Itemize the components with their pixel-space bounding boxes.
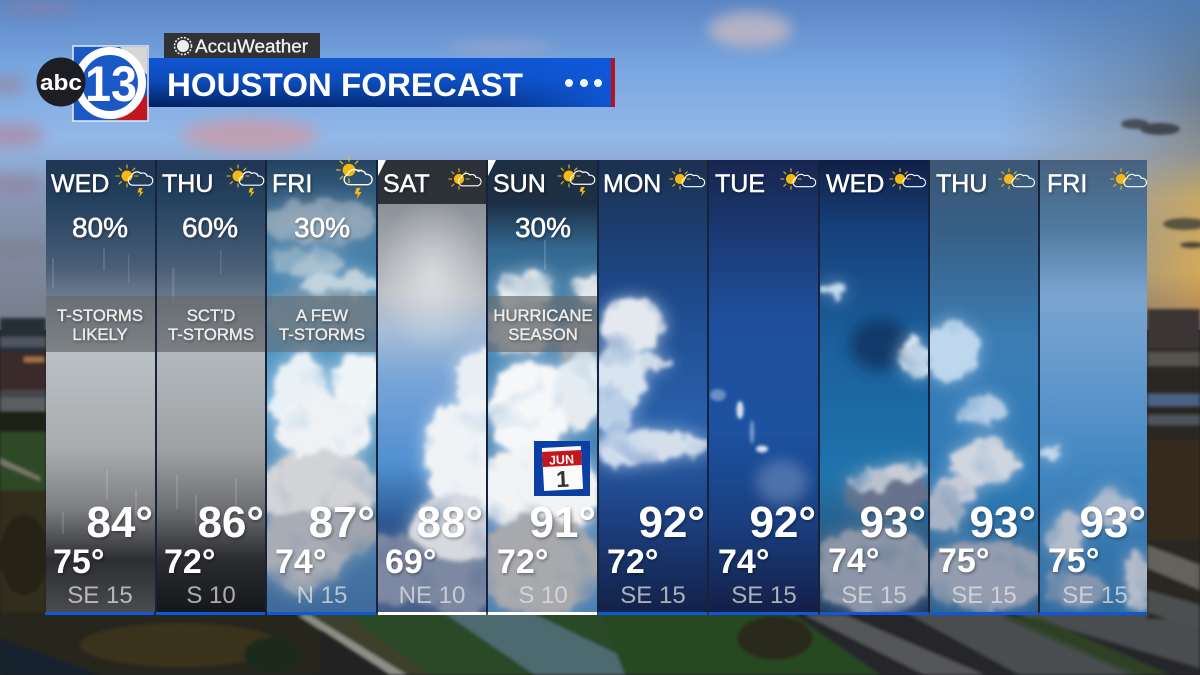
condition band (267, 296, 376, 352)
forecast note (168, 306, 254, 344)
day label: FRI (1047, 170, 1087, 198)
weather icon (999, 169, 1035, 189)
forecast note: T-STORMS (279, 325, 365, 344)
high temperature: 88° (416, 498, 483, 547)
wind: S 10 (186, 582, 236, 609)
forecast note: LIKELY (72, 325, 128, 344)
sky (46, 160, 155, 612)
wind: N 15 (297, 582, 347, 609)
forecast note (493, 306, 593, 344)
wind: SE 15 (620, 582, 686, 609)
sky (378, 204, 486, 612)
sky (820, 160, 928, 612)
clouds (710, 389, 808, 504)
forecast note: SCT'D (187, 306, 235, 325)
day label: WED (51, 170, 109, 198)
low temperature: 69° (385, 543, 436, 581)
wind: S 10 (518, 582, 568, 609)
day label: FRI (272, 170, 312, 198)
weather icon (336, 157, 372, 199)
low temperature: 72° (497, 543, 548, 581)
low temperature: 75° (1048, 542, 1099, 580)
condition band (46, 296, 155, 352)
rain chance: 30% (515, 212, 571, 243)
rain chance: 60% (182, 212, 238, 243)
low temperature: 72° (164, 543, 215, 581)
brand name: AccuWeather (195, 36, 308, 56)
panel: SAT (378, 160, 486, 615)
low temperature: 74° (275, 543, 326, 581)
underline (709, 612, 818, 615)
wind: SE 15 (67, 582, 133, 609)
panel: WED next week (815, 160, 935, 615)
weather icon (670, 169, 705, 189)
weather icon (1111, 169, 1147, 189)
wind: NE 10 (399, 582, 465, 609)
panel: THU next week (930, 160, 1038, 615)
sky (930, 160, 1038, 612)
forecast note (57, 306, 143, 344)
sky (267, 160, 376, 612)
weather icon (449, 169, 481, 189)
forecast note: T-STORMS (57, 306, 143, 325)
forecast note: A FEW (296, 306, 348, 325)
weather icon (116, 165, 153, 197)
forecast note: T-STORMS (168, 325, 254, 344)
clouds (815, 286, 935, 615)
day label: THU (936, 170, 987, 198)
icon: June 1 calendar: JUN (549, 452, 574, 468)
rain streaks (172, 250, 237, 525)
high temperature: 93° (969, 498, 1036, 547)
condition band (488, 296, 597, 352)
sky (488, 204, 597, 612)
low temperature: 74° (828, 542, 879, 580)
forecast note: HURRICANE (493, 306, 593, 325)
clouds (1040, 447, 1152, 612)
numeral 13: 13 (85, 56, 137, 112)
day label: SAT (383, 170, 430, 198)
sky (709, 160, 818, 612)
clouds (594, 297, 709, 468)
header band (378, 160, 486, 204)
underline (267, 612, 376, 615)
title bar (148, 58, 615, 107)
red edge (611, 58, 615, 107)
panel: FRI (267, 156, 376, 615)
sky (599, 160, 707, 612)
icon: AccuWeather sun (174, 38, 192, 54)
title: HOUSTON FORECAST (167, 67, 523, 103)
clouds (922, 322, 1045, 610)
AccuWeather tag (164, 33, 320, 58)
underline (156, 612, 265, 615)
three dots (565, 79, 602, 87)
low temperature: 72° (607, 543, 658, 581)
condition band (157, 296, 265, 352)
wind: SE 15 (731, 582, 797, 609)
icon: June 1 calendar: 1 (555, 466, 570, 492)
icon: June 1 calendar (534, 441, 590, 496)
logo: abc13 (36, 46, 148, 121)
underline (1040, 612, 1147, 615)
weather icon (781, 169, 816, 189)
panel: FRI next week (1040, 160, 1152, 615)
wind: SE 15 (841, 582, 907, 609)
high temperature: 84° (86, 498, 153, 547)
day label: TUE (715, 170, 765, 198)
sun glow (389, 207, 475, 341)
underline (488, 612, 597, 615)
rain chance: 80% (72, 212, 128, 243)
rain chance: 30% (294, 212, 350, 243)
high temperature: 92° (638, 498, 705, 547)
high temperature: 93° (859, 498, 926, 547)
underline (930, 612, 1038, 615)
clouds (488, 259, 597, 612)
high temperature: 91° (529, 498, 596, 547)
header band (488, 160, 597, 204)
rain streak (544, 240, 546, 270)
clouds (267, 192, 376, 602)
high temperature: 86° (197, 498, 264, 547)
low temperature: 75° (938, 542, 989, 580)
panel: THU (156, 160, 265, 615)
rain streaks (52, 248, 137, 534)
panel: SUN (488, 160, 597, 615)
day label: MON (603, 170, 661, 198)
wind: SE 15 (951, 582, 1017, 609)
panel: WED (45, 160, 155, 615)
low temperature: 74° (718, 543, 769, 581)
forecast note: SEASON (508, 325, 578, 344)
day label: SUN (493, 170, 546, 198)
underline (598, 612, 707, 615)
day label: THU (162, 170, 213, 198)
forecast note (279, 306, 365, 344)
corner mark (378, 160, 386, 176)
column backing (46, 160, 1147, 612)
underline (378, 612, 486, 615)
wind: SE 15 (1062, 582, 1128, 609)
day label: WED (826, 170, 884, 198)
weather icon (558, 165, 595, 196)
high temperature: 92° (749, 498, 816, 547)
underline (45, 612, 154, 615)
weather icon (890, 169, 926, 189)
landscape (0, 309, 1200, 675)
sky (1040, 160, 1147, 612)
clouds (378, 342, 486, 612)
abc wordmark: abc (40, 70, 82, 95)
low temperature: 75° (53, 543, 104, 581)
high temperature: 93° (1079, 498, 1146, 547)
sky (157, 160, 265, 612)
underline (820, 612, 928, 615)
panel: MON (594, 160, 709, 615)
corner mark (488, 160, 496, 176)
high temperature: 87° (308, 498, 375, 547)
panel: TUE (709, 160, 818, 615)
weather icon (227, 165, 264, 197)
